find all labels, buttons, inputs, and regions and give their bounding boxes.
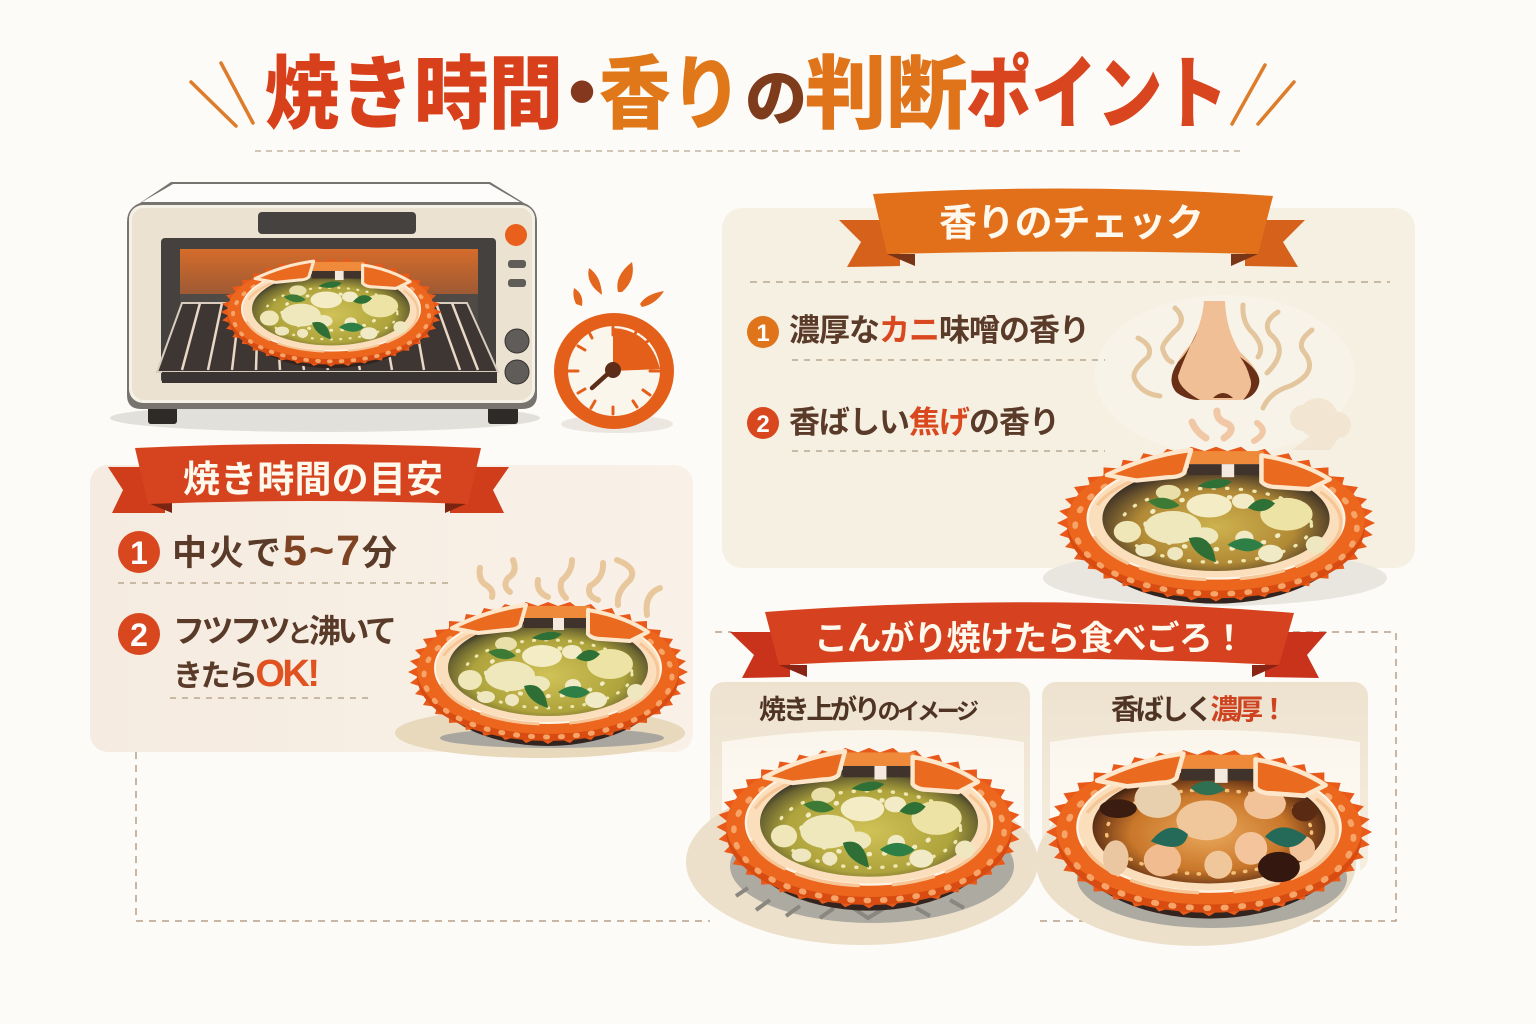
plate shadow (395, 708, 685, 758)
title accent rays left (191, 63, 253, 126)
timer face (554, 313, 674, 429)
oven rack (157, 303, 498, 383)
oven feet (148, 404, 518, 424)
step 1 badge (118, 531, 160, 573)
crab gratin: aroma panel (1057, 447, 1375, 604)
ribbon: aroma check (839, 188, 1305, 267)
plate (1036, 778, 1356, 946)
crab gratin (408, 602, 688, 746)
oven buttons (508, 260, 526, 287)
steam (480, 560, 660, 615)
step 2 text: フツフツと沸いて (173, 613, 397, 649)
comparison card: baked image (686, 682, 1038, 945)
toaster oven illustration (110, 182, 540, 432)
aroma 2 text: 香ばしい焦げの香り (789, 405, 1060, 440)
crab in oven (220, 259, 442, 368)
aroma 1 badge: 1 (756, 320, 770, 347)
oven knobs (505, 329, 529, 384)
aroma 2 badge (747, 407, 779, 439)
panel: bake time (90, 444, 693, 758)
oven body (127, 182, 537, 409)
crab gratin (1046, 750, 1372, 919)
timer hand (592, 362, 621, 388)
timer icon (554, 262, 674, 433)
orange dial (505, 224, 527, 246)
timer wedge (613, 328, 660, 371)
ribbon: ready to eat (730, 602, 1327, 678)
title: の (745, 65, 807, 134)
plate (686, 779, 1038, 945)
oven window (161, 238, 496, 383)
timer shadow (561, 415, 673, 433)
ribbon: bake time (108, 444, 509, 513)
title: ・ (542, 50, 622, 139)
card label: 香ばしく濃厚！ (1111, 694, 1288, 725)
step 1 text: 中火で5~7分 (172, 527, 397, 575)
aroma 2 badge: 2 (756, 411, 770, 438)
ribbon: aroma check: 香りのチェック (939, 203, 1204, 245)
timer sparks (573, 262, 664, 307)
timer ticks (568, 327, 660, 414)
oven shadow (110, 404, 540, 432)
step 1 badge: 1 (130, 535, 148, 571)
title: ポイント (966, 50, 1228, 139)
panel: aroma check (722, 188, 1415, 568)
title: 判断 (805, 50, 968, 139)
title: 焼き時間 (265, 50, 563, 139)
oven handle (258, 212, 416, 234)
ribbon: bake time: 焼き時間の目安 (183, 459, 443, 500)
title (265, 50, 1228, 139)
step 2 badge: 2 (130, 617, 148, 653)
aroma 1 text: 濃厚なカニ味噌の香り (789, 313, 1090, 348)
title: 香り (599, 50, 742, 139)
aroma puff (1290, 398, 1351, 450)
ribbon: ready to eat: こんがり焼けたら食べごろ！ (814, 619, 1246, 658)
title accent rays right (1232, 65, 1294, 124)
icon: nose (1171, 301, 1259, 400)
aroma 1 badge (747, 316, 779, 348)
crab gratin (716, 748, 1022, 911)
step 2 badge (118, 613, 160, 655)
aroma steam (1134, 305, 1312, 441)
comparison card: toasted (1036, 682, 1372, 946)
crab shadow: aroma panel (1043, 550, 1387, 606)
step 2 text: きたらOK! (173, 653, 320, 695)
card label: 焼き上がりのイメージ (759, 694, 979, 725)
step 2 text (173, 613, 397, 695)
